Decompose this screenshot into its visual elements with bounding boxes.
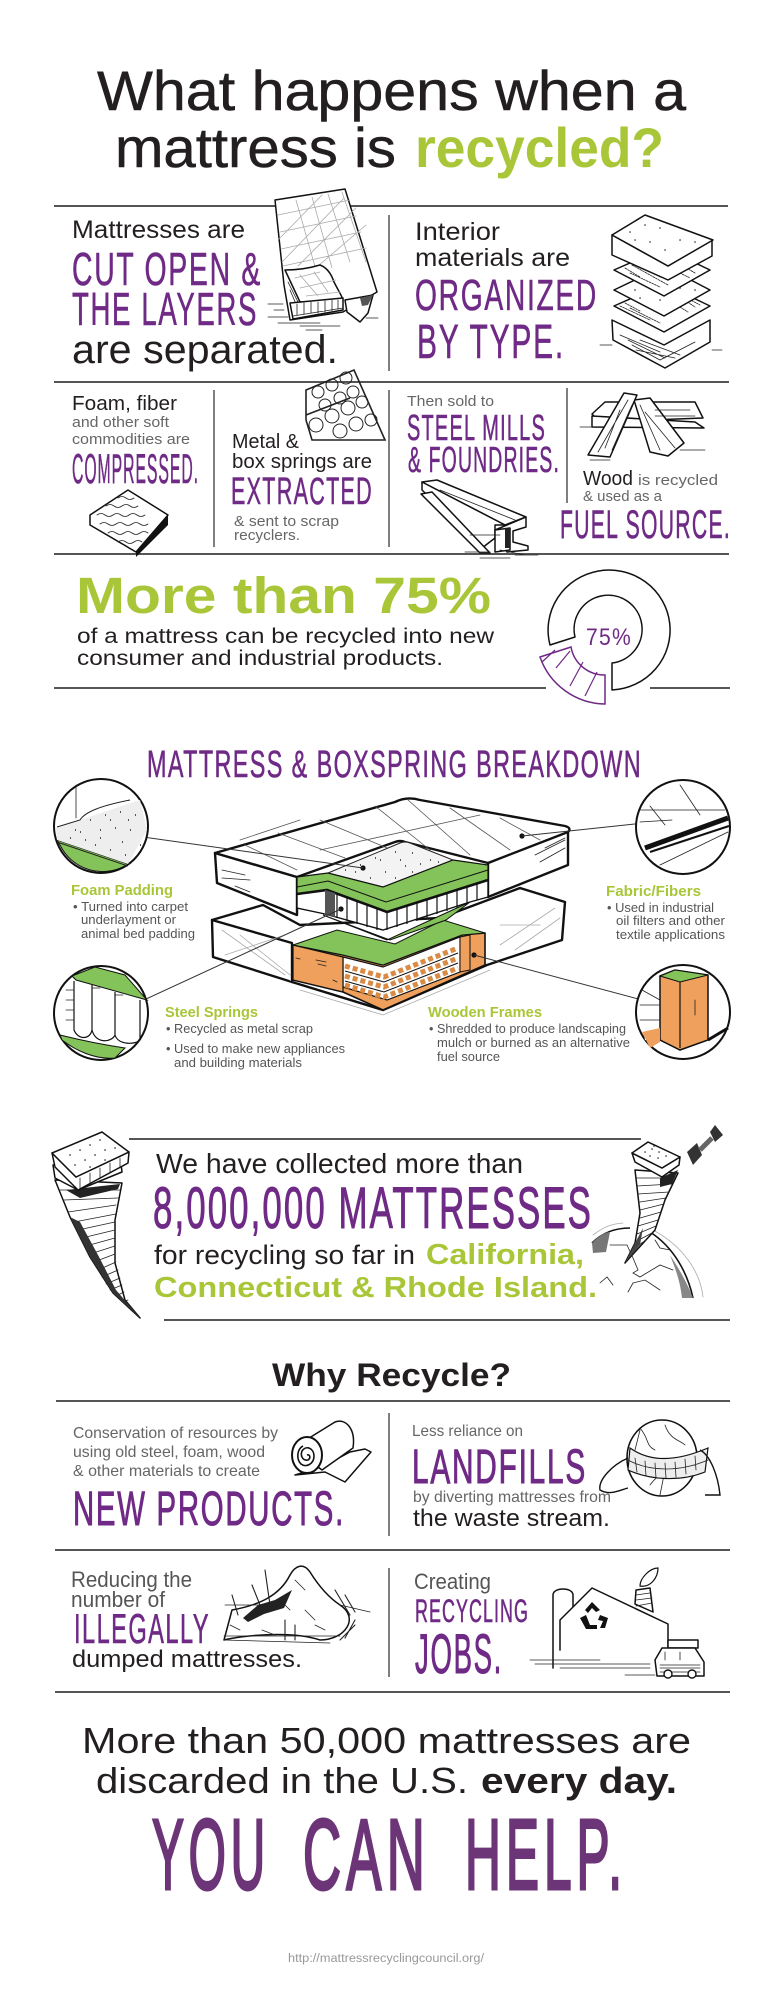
callout circle: steel springs xyxy=(54,966,148,1060)
text: wood fuel source: Wood xyxy=(583,468,633,490)
panel: metal extracted xyxy=(231,370,385,544)
icon: steel beam xyxy=(421,480,538,558)
text: illegally dumped mattresses: number of xyxy=(71,1587,166,1612)
text: steel mills and foundries: & FOUNDRIES. xyxy=(408,439,560,480)
panel: wood fuel xyxy=(560,393,731,547)
chart: 75 percent ring: 75% xyxy=(586,624,632,651)
text: conservation of resources: using old steel, foam, wood xyxy=(73,1444,265,1461)
text: illegally dumped mattresses xyxy=(71,1567,302,1673)
title xyxy=(97,59,687,179)
callout circle: fabric fibers xyxy=(636,780,730,874)
title: mattress is xyxy=(115,116,396,179)
panel: steel mills xyxy=(407,393,560,558)
text: less reliance on landfills: by diverting mattresses from xyxy=(413,1489,611,1506)
text: less reliance on landfills: the waste stream. xyxy=(413,1505,610,1532)
label: wooden frames: mulch or burned as an alternative xyxy=(437,1035,630,1050)
chart: 75 percent ring xyxy=(540,570,670,704)
text: less reliance on landfills xyxy=(412,1423,611,1532)
icon: cut open mattress xyxy=(268,189,378,330)
text: cut open and layers separated: CUT OPEN & xyxy=(72,243,262,295)
text: cut open and layers separated: are separated. xyxy=(72,328,338,372)
icon: rolled material xyxy=(292,1421,371,1482)
text: wood fuel source xyxy=(560,468,731,547)
text: foam fiber compressed xyxy=(72,393,199,492)
text: conservation of resources: & other materials to create xyxy=(73,1463,260,1480)
text: wood fuel source: & used as a xyxy=(583,488,663,505)
label: steel springs: • Recycled as metal scrap xyxy=(166,1021,313,1036)
text: metal and box springs extracted: & sent to scrap xyxy=(234,513,339,530)
call to action: you can help: YOU xyxy=(152,1799,270,1911)
label: foam padding: underlayment or xyxy=(81,912,177,927)
mattress xyxy=(215,798,569,958)
text: more than 75 percent: More than 75% xyxy=(76,567,491,624)
icon: wood planks xyxy=(580,393,705,460)
text: cut open and layers separated xyxy=(72,216,338,372)
text: creating recycling jobs: Creating xyxy=(414,1569,491,1594)
text: COMPRESSED. xyxy=(72,445,199,492)
text: more than 75 percent xyxy=(76,567,495,670)
icon: recycling arrows xyxy=(580,1602,608,1629)
icon: earth with wall xyxy=(600,1420,720,1496)
text: illegally dumped mattresses: Reducing the xyxy=(71,1567,192,1592)
text: metal and box springs extracted: recyclers. xyxy=(234,527,300,544)
text: metal and box springs extracted: Metal & xyxy=(232,431,300,453)
label: steel springs: • Used to make new appliances xyxy=(166,1041,345,1056)
label: foam padding: animal bed padding xyxy=(81,926,195,941)
panel: foam compressed xyxy=(72,393,199,557)
icon: stacked layers xyxy=(600,215,722,368)
label: wooden frames: fuel source xyxy=(437,1049,500,1064)
label: fabric fibers xyxy=(606,883,726,942)
text: more than 75 percent: of a mattress can be recycled into new xyxy=(77,625,495,648)
closing statement xyxy=(82,1720,691,1801)
closing statement: every day. xyxy=(481,1760,677,1801)
icon: box springs xyxy=(306,370,385,440)
panel: new products xyxy=(73,1421,371,1536)
panel: illegally dumped xyxy=(71,1566,370,1673)
text: organized by type xyxy=(415,218,598,369)
call to action: you can help xyxy=(152,1799,627,1911)
text: collected total: We have collected more than xyxy=(156,1148,523,1179)
panel: landfills xyxy=(412,1420,720,1532)
label: fabric fibers: • Used in industrial xyxy=(607,900,714,915)
text: organized by type: ORGANIZED xyxy=(415,271,598,320)
text: creating recycling jobs: JOBS. xyxy=(415,1622,503,1685)
label: fabric fibers: Fabric/Fibers xyxy=(606,883,701,900)
panel: organized by type xyxy=(415,215,722,369)
callout circle: wooden frames xyxy=(636,965,730,1059)
panel: cut open xyxy=(72,189,378,372)
text: steel mills and foundries: Then sold to xyxy=(407,393,494,410)
text: organized by type: materials are xyxy=(415,244,570,272)
label: wooden frames: • Shredded to produce landscaping xyxy=(429,1021,626,1036)
heading: why recycle: Why Recycle? xyxy=(272,1357,511,1393)
text: more than 75 percent: consumer and industrial products. xyxy=(77,647,443,670)
text: collected total: California, xyxy=(426,1239,584,1271)
text: less reliance on landfills: Less reliance on xyxy=(412,1423,523,1440)
panel: recycling jobs xyxy=(414,1568,704,1685)
closing statement: discarded in the U.S. xyxy=(96,1760,468,1801)
text: less reliance on landfills: LANDFILLS xyxy=(412,1441,587,1494)
text: conservation of resources xyxy=(73,1425,345,1536)
label: foam padding: • Turned into carpet xyxy=(73,899,188,914)
text: illegally dumped mattresses: dumped mattresses. xyxy=(72,1646,302,1673)
label: wooden frames: Wooden Frames xyxy=(428,1004,542,1021)
text: creating recycling jobs: RECYCLING xyxy=(415,1593,529,1629)
text: metal and box springs extracted: EXTRACTED xyxy=(231,471,373,513)
label: fabric fibers: textile applications xyxy=(616,927,726,942)
label: foam padding: Foam Padding xyxy=(71,882,173,899)
text: steel mills and foundries: STEEL MILLS xyxy=(407,407,546,448)
text: foam fiber compressed: Foam, fiber xyxy=(72,393,177,415)
text: creating recycling jobs xyxy=(414,1569,529,1685)
text: collected total: for recycling so far in xyxy=(154,1240,415,1270)
text: wood fuel source: is recycled xyxy=(638,472,718,489)
text: organized by type: BY TYPE. xyxy=(417,316,565,369)
text: foam fiber compressed: commodities are xyxy=(72,431,190,448)
text: cut open and layers separated: THE LAYERS xyxy=(72,283,258,335)
panel: more than 75 percent xyxy=(76,567,670,704)
text: foam fiber compressed: and other soft xyxy=(72,414,170,431)
text: organized by type: Interior xyxy=(415,218,500,246)
closing statement: More than 50,000 mattresses are xyxy=(82,1720,691,1761)
title: recycled? xyxy=(415,116,664,179)
callout circle: foam padding xyxy=(54,779,148,873)
diagram: mattress and boxspring layers xyxy=(212,798,569,1015)
text: steel mills and foundries xyxy=(407,393,560,480)
label: wooden frames xyxy=(428,1004,630,1064)
label: fabric fibers: oil filters and other xyxy=(616,913,726,928)
text: collected total: Connecticut & Rhode Island. xyxy=(154,1272,597,1304)
text: conservation of resources: Conservation of resources by xyxy=(73,1425,278,1442)
text: illegally dumped mattresses: ILLEGALLY xyxy=(74,1605,210,1652)
icon: mattress tornado right with earth and satellite xyxy=(592,1125,723,1298)
call to action: you can help: CAN xyxy=(303,1799,430,1911)
icon: recycling plant xyxy=(530,1568,704,1678)
label: foam padding xyxy=(71,882,195,941)
text: metal and box springs extracted xyxy=(231,431,373,544)
label: steel springs xyxy=(165,1004,345,1070)
title: What happens when a xyxy=(97,59,687,122)
icon: dumped mattress xyxy=(224,1566,370,1643)
text: conservation of resources: NEW PRODUCTS. xyxy=(73,1483,345,1536)
label: steel springs: and building materials xyxy=(174,1055,303,1070)
icon: mattress tornado left xyxy=(52,1132,140,1318)
text: cut open and layers separated: Mattresses are xyxy=(72,216,245,244)
icon: foam block xyxy=(90,490,168,557)
text: metal and box springs extracted: box springs are xyxy=(232,451,372,473)
text: collected total xyxy=(153,1148,597,1304)
source url: http://mattressrecyclingcouncil.org/ xyxy=(288,1953,485,1965)
panel: collected 8 million mattresses xyxy=(52,1125,730,1320)
label: steel springs: Steel Springs xyxy=(165,1004,258,1021)
boxspring xyxy=(212,888,565,1015)
